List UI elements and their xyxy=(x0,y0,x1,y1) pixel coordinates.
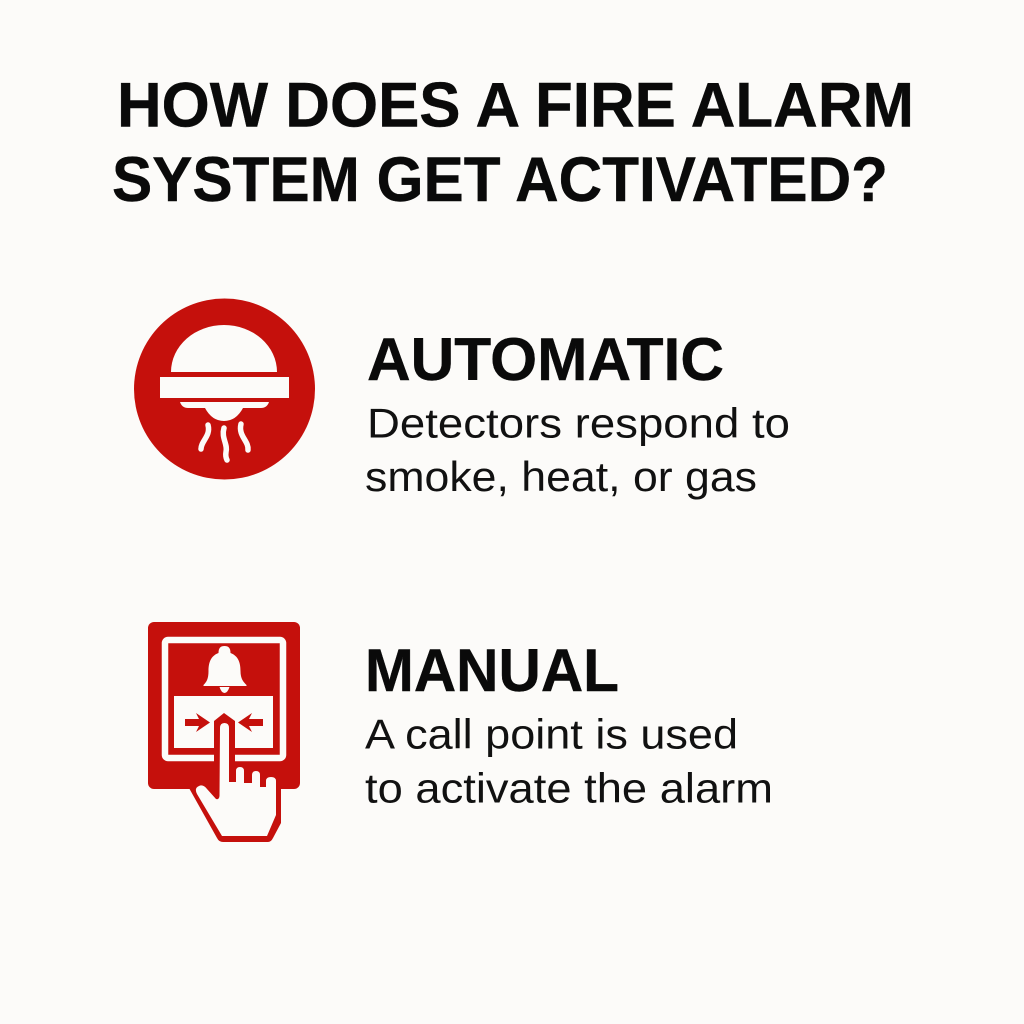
text: automatic description: Detectors respond to xyxy=(367,400,790,446)
text: manual description xyxy=(365,710,773,812)
icon: pointing hand xyxy=(189,713,281,842)
arrows xyxy=(185,713,263,732)
icon: bell xyxy=(204,646,246,693)
heading: automatic: AUTOMATIC xyxy=(367,326,724,393)
heading: manual: MANUAL xyxy=(365,637,619,704)
icon: smoke detector xyxy=(134,298,315,480)
icon: manual call point xyxy=(148,622,300,842)
text: automatic description: smoke, heat, or gas xyxy=(365,453,757,500)
text: manual description: A call point is used xyxy=(365,710,738,758)
text: manual description: to activate the alarm xyxy=(365,764,773,812)
title: SYSTEM GET ACTIVATED? xyxy=(112,145,888,215)
title: HOW DOES A FIRE ALARM xyxy=(117,70,914,140)
title xyxy=(112,70,914,215)
text: automatic description xyxy=(365,400,790,500)
